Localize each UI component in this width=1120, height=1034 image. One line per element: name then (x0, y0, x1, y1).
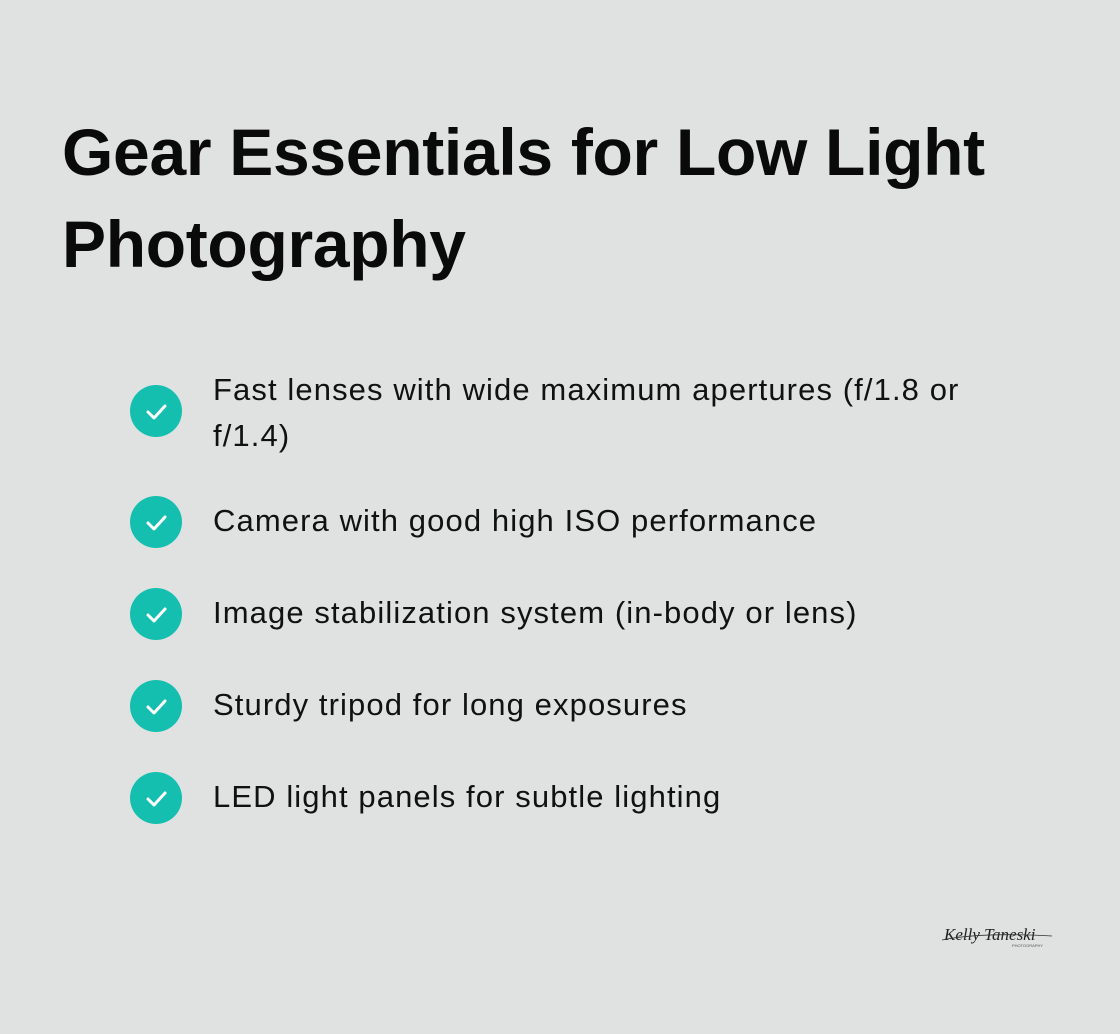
text: Fast lenses with wide maximum apertures (f/1.8 or (213, 372, 959, 407)
icon: check (130, 588, 182, 640)
item 1 (130, 372, 959, 453)
signature logo: PHOTOGRAPHY (1012, 943, 1043, 948)
title: Gear Essentials for Low Light (62, 115, 985, 189)
icon: check (130, 680, 182, 732)
item 2 (130, 496, 817, 548)
text: Image stabilization system (in-body or lens) (213, 595, 858, 630)
icon: check (130, 772, 182, 824)
title (62, 115, 985, 281)
text (213, 372, 959, 453)
icon: check (130, 496, 182, 548)
text: LED light panels for subtle lighting (213, 779, 721, 814)
signature logo (942, 925, 1052, 948)
item 4 (130, 680, 688, 732)
signature logo: Kelly Taneski (943, 925, 1036, 944)
item 5 (130, 772, 721, 824)
icon: check (130, 385, 182, 437)
text: Camera with good high ISO performance (213, 503, 817, 538)
item 3 (130, 588, 858, 640)
text: f/1.4) (213, 418, 290, 453)
title: Photography (62, 207, 466, 281)
text: Sturdy tripod for long exposures (213, 687, 688, 722)
